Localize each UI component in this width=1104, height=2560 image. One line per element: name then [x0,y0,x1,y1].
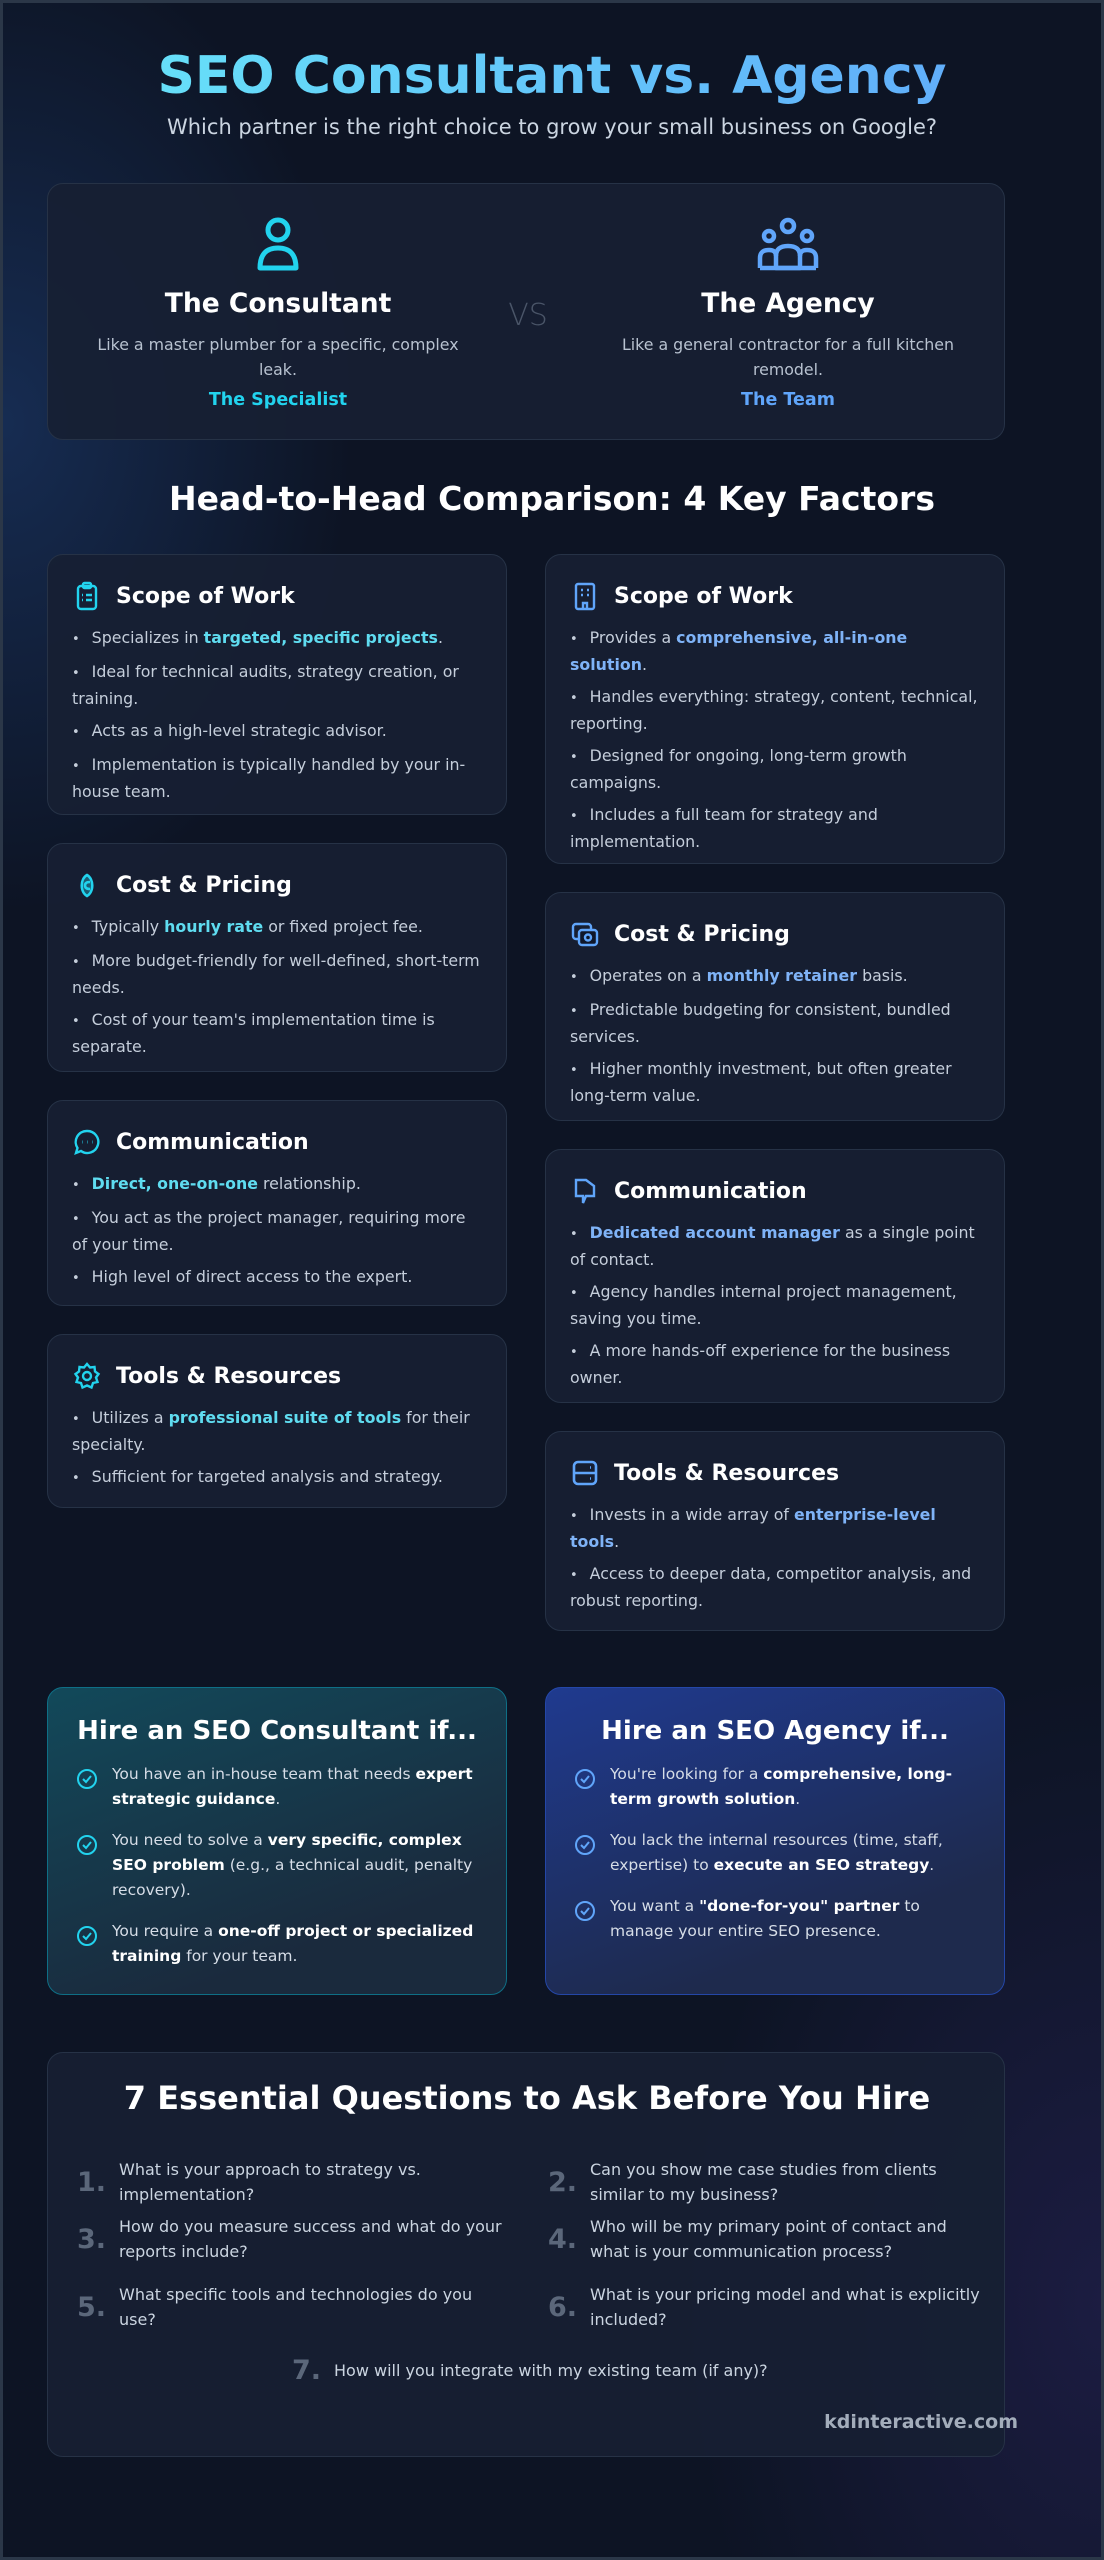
question 2: 2. [548,2166,577,2198]
comparison heading: Head-to-Head Comparison: 4 Key Factors [169,479,935,518]
card: consultant scope: Specializes in targeted, specific projects. [92,628,443,647]
question 7: How will you integrate with my existing team (if any)? [334,2361,768,2380]
consultant intro [97,218,459,410]
heading with chat icon: Communication [116,1130,309,1154]
heading: Hire an SEO Agency if... [601,1716,949,1746]
item 3: You require a one-off project or specialized training for your team. [112,1922,473,1965]
card: consultant cost [47,843,507,1072]
question 7 [292,2355,768,2386]
panel: hire consultant [47,1687,507,1995]
consultant intro: Like a master plumber for a specific, complex leak. [97,335,459,379]
card: agency scope: Includes a full team for strategy and implementation. [570,805,878,851]
footer: kdinteractive.com [824,2411,1018,2433]
agency intro: The Agency [701,288,875,319]
consultant intro: The Consultant [165,288,391,319]
question 2: Can you show me case studies from clients similar to my business? [590,2160,937,2204]
card: agency cost: Predictable budgeting for consistent, bundled services. [570,1000,951,1046]
card: consultant cost: Cost of your team's implementation time is separate. [72,1010,435,1056]
card: agency communication: Dedicated account manager as a single point of contact. [570,1223,975,1269]
card: consultant communication: Direct, one-on-one relationship. [92,1174,361,1193]
question 6: 6. [548,2292,577,2322]
item 1: You're looking for a comprehensive, long-term growth solution. [610,1765,952,1808]
card: agency cost: Higher monthly investment, but often greater long-term value. [570,1059,952,1105]
agency intro [622,218,954,410]
title: SEO Consultant vs. Agency [157,46,947,106]
card: consultant scope: Implementation is typically handled by your in-house team. [72,755,465,801]
card: consultant tools: Sufficient for targeted analysis and strategy. [92,1467,443,1486]
question 4: Who will be my primary point of contact and what is your communication process? [590,2217,947,2261]
vs label: VS [508,298,548,333]
question 1: What is your approach to strategy vs. implementation? [119,2160,421,2204]
card: consultant cost: Typically hourly rate or fixed project fee. [92,917,423,936]
card: consultant cost: More budget-friendly for well-defined, short-term needs. [72,951,480,997]
questions heading: 7 Essential Questions to Ask Before You Hire [124,2079,930,2117]
title [3,41,1101,111]
agency intro: Like a general contractor for a full kitchen remodel. [622,335,954,379]
item 1: You have an in-house team that needs expert strategic guidance. [112,1765,473,1808]
heading with building icon: Scope of Work [614,584,793,608]
card: agency tools: Invests in a wide array of enterprise-level tools. [570,1505,936,1551]
question 3: 3. [77,2224,106,2254]
panel: questions [47,2052,1005,2457]
question 5: 5. [77,2292,106,2322]
heading with message icon: Communication [614,1178,807,1204]
consultant intro: The Specialist [209,390,347,410]
heading: Hire an SEO Consultant if... [77,1716,477,1746]
card: agency scope [545,554,1005,864]
question 3: How do you measure success and what do your reports include? [119,2217,502,2261]
card: consultant tools [47,1334,507,1508]
card: agency communication: A more hands-off experience for the business owner. [570,1341,950,1387]
card: consultant tools: Utilizes a professional suite of tools for their specialty. [72,1408,470,1454]
item 2: You need to solve a very specific, complex SEO problem (e.g., a technical audit, penalty recovery). [112,1831,472,1899]
item 2: You lack the internal resources (time, staff, expertise) to execute an SEO strategy. [610,1831,943,1874]
heading with server icon: Tools & Resources [614,1460,839,1486]
card: agency communication [545,1149,1005,1403]
panel: consultant vs agency [47,183,1005,440]
card: agency tools: Access to deeper data, competitor analysis, and robust reporting. [570,1564,971,1610]
card: agency scope: Designed for ongoing, long-term growth campaigns. [570,746,907,792]
card: consultant scope [47,554,507,815]
card: agency cost [545,892,1005,1121]
question 1: 1. [77,2166,106,2198]
card: consultant scope: Acts as a high-level strategic advisor. [92,721,387,740]
card: agency scope: Provides a comprehensive, all-in-one solution. [570,628,907,674]
card: agency cost: Operates on a monthly retainer basis. [590,966,908,985]
card: consultant communication [47,1100,507,1306]
card: consultant scope: Ideal for technical audits, strategy creation, or training. [72,662,459,708]
agency intro: The Team [741,390,835,410]
item 3: You want a "done-for-you" partner to manage your entire SEO presence. [610,1897,920,1940]
card: agency communication: Agency handles internal project management, saving you time. [570,1282,957,1328]
question 5: What specific tools and technologies do you use? [119,2285,472,2329]
card: agency scope: Handles everything: strategy, content, technical, reporting. [570,687,977,733]
card: agency tools [545,1431,1005,1631]
subtitle: Which partner is the right choice to grow your small business on Google? [167,115,937,139]
question 4: 4. [548,2224,577,2254]
heading with coin icon: Cost & Pricing [116,872,292,898]
card: consultant communication: You act as the project manager, requiring more of your time. [72,1208,465,1254]
question 6: What is your pricing model and what is explicitly included? [590,2285,980,2329]
question 7: 7. [292,2355,321,2386]
card: consultant communication: High level of direct access to the expert. [92,1267,412,1286]
heading with gear icon: Tools & Resources [116,1364,341,1388]
icon: person [258,218,298,270]
heading with cash icon: Cost & Pricing [614,922,790,946]
heading with clipboard icon: Scope of Work [116,584,295,608]
icon: team [758,218,818,270]
panel: hire agency [545,1687,1005,1995]
